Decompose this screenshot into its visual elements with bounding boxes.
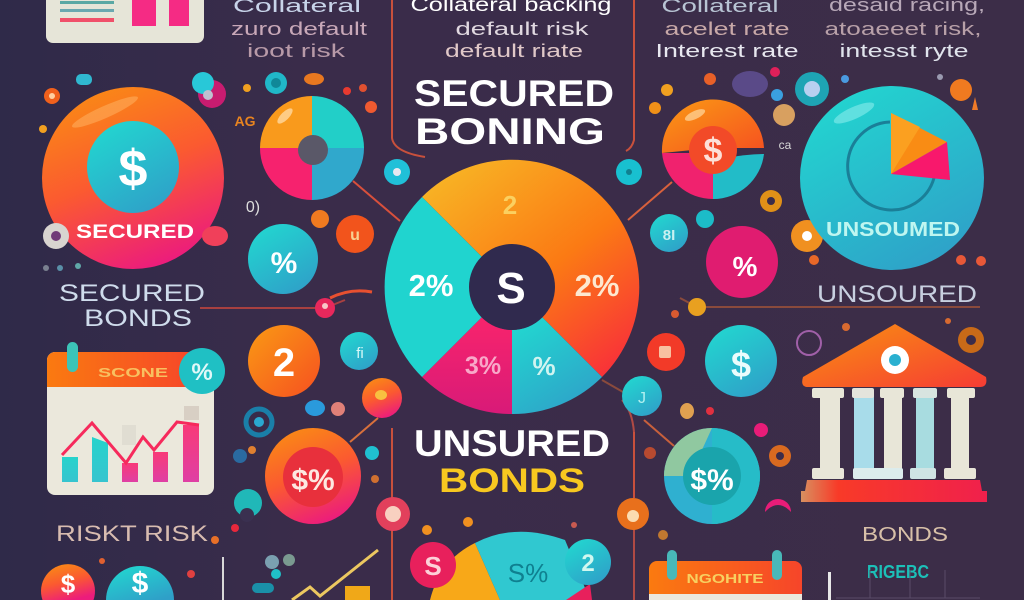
icon: bank temple <box>801 324 987 502</box>
connector lines and frame rules <box>200 0 980 600</box>
panel: big secured circle <box>42 87 224 269</box>
icon: dollar teal right: $ <box>731 344 751 385</box>
text: top left column <box>231 0 367 61</box>
icon: orange coin <box>336 215 374 253</box>
icon: bottom dollar coin orange <box>41 564 95 600</box>
text: top right column: intesst ryte <box>840 41 968 61</box>
chart: right pie: $ <box>704 132 723 170</box>
chart: bottom center pie: S% <box>508 558 548 588</box>
icon: number 2 circle <box>248 325 320 397</box>
bars <box>62 425 199 482</box>
heading: unsured bonds <box>414 423 610 500</box>
icon: teal coin lower right <box>622 376 662 416</box>
icon: percent badge <box>179 348 225 394</box>
icon: percent badge: % <box>191 359 213 386</box>
text: secured bonds label <box>59 280 205 332</box>
chart: bottom growth line <box>222 550 378 600</box>
icon: teal coin: 8I <box>663 227 675 244</box>
icon: teal 2 coin: 2 <box>581 550 595 577</box>
value labels: 2% <box>575 268 619 303</box>
icon: teal coin <box>650 214 688 252</box>
icon: large dollar percent orange <box>265 428 361 524</box>
panel: calendar bottom right <box>649 550 802 600</box>
panel: calendar bottom right: NGOHITE <box>686 571 764 586</box>
icon: bottom dollar coin teal <box>106 566 174 600</box>
icon: orange coin lower <box>362 378 402 418</box>
icon: percent circle right <box>706 226 778 298</box>
text: top center column: default risk <box>456 19 590 39</box>
icon: large dollar percent teal: $% <box>690 464 734 497</box>
text: top right-center column: acelet rate <box>664 19 790 39</box>
text: unsoured label: UNSOURED <box>817 281 977 308</box>
text: secured bonds label: BONDS <box>84 305 192 332</box>
chart: bottom center pie <box>410 532 611 600</box>
heading: secured boning: BONING <box>415 111 605 152</box>
small decorative dots, left <box>39 72 706 318</box>
panel: calendar chart left: SCONE <box>98 365 168 380</box>
icon: small orange coin right <box>647 333 685 371</box>
panel: big unsecured circle <box>800 86 984 270</box>
small decorative dots, left: AG <box>234 113 256 129</box>
icon: teal coin upper <box>340 332 378 370</box>
value labels: 3% <box>465 352 501 380</box>
icon: number 2 circle: 2 <box>273 341 295 385</box>
text: top center column <box>410 0 612 61</box>
small decorative dots, left: 0) <box>246 199 260 216</box>
chart: central donut <box>385 160 639 414</box>
icon: teal coin lower right: J <box>638 390 646 407</box>
value labels: 2% <box>409 268 453 303</box>
text: top center column: default riate <box>445 41 583 61</box>
icon: percent circle right: % <box>733 251 758 282</box>
top-left card <box>46 0 204 43</box>
icon: large dollar percent orange: $% <box>291 464 335 497</box>
icon: pie with slice <box>848 113 950 210</box>
value labels: S <box>496 264 526 313</box>
text: top left column: ioot risk <box>247 41 347 61</box>
heading: secured boning <box>414 73 614 152</box>
chart: left pie <box>260 96 364 200</box>
label: unsecured: UNSOUMED <box>826 219 960 241</box>
chart: bottom right <box>828 562 980 600</box>
icon: small orange coin <box>617 498 649 530</box>
small decorative dots, right <box>616 67 986 266</box>
text: top right column <box>824 0 985 61</box>
panel: calendar chart left <box>47 342 225 495</box>
value labels <box>409 190 619 381</box>
icon: dollar coin <box>87 121 179 213</box>
text: secured bonds label: SECURED <box>59 280 205 307</box>
icon: teal coin upper: fi <box>356 345 364 362</box>
icon: pink S coin <box>410 542 456 588</box>
icon: bottom dollar coin orange: $ <box>61 569 76 599</box>
icon: large dollar percent teal <box>664 428 760 524</box>
heading: secured boning: SECURED <box>414 73 614 114</box>
icon: percent circle left: % <box>271 247 297 280</box>
text: risk label: RISKT RISK <box>56 521 208 546</box>
value labels: 2 <box>503 190 517 220</box>
label: secured: SECURED <box>76 222 194 243</box>
heading: unsured bonds: BONDS <box>439 462 585 500</box>
icon: bottom dollar coin teal: $ <box>132 567 149 600</box>
icon: dollar teal right <box>705 325 777 397</box>
text: top right-center column <box>656 0 798 61</box>
text: bonds label: BONDS <box>862 524 948 546</box>
icon: orange coin: u <box>350 227 360 244</box>
value labels: % <box>532 351 556 381</box>
icon: percent circle left <box>248 224 318 294</box>
columns <box>812 388 976 479</box>
chart: bottom right: RIGEBC <box>867 562 929 582</box>
icon: small pink coin <box>376 497 410 531</box>
heading: unsured bonds: UNSURED <box>414 423 610 464</box>
text: top right column: atoaeeet risk, <box>824 19 982 39</box>
decorative dots lower left <box>99 310 984 593</box>
icon: dollar coin: $ <box>119 140 148 198</box>
chart: right pie <box>662 99 764 199</box>
text: top right-center column: Interest rate <box>656 41 798 61</box>
text: top left column: zuro default <box>231 19 367 39</box>
icon: pink S coin: S <box>424 551 442 581</box>
small decorative dots, right: ca <box>779 138 792 152</box>
icon: teal 2 coin <box>565 539 611 585</box>
